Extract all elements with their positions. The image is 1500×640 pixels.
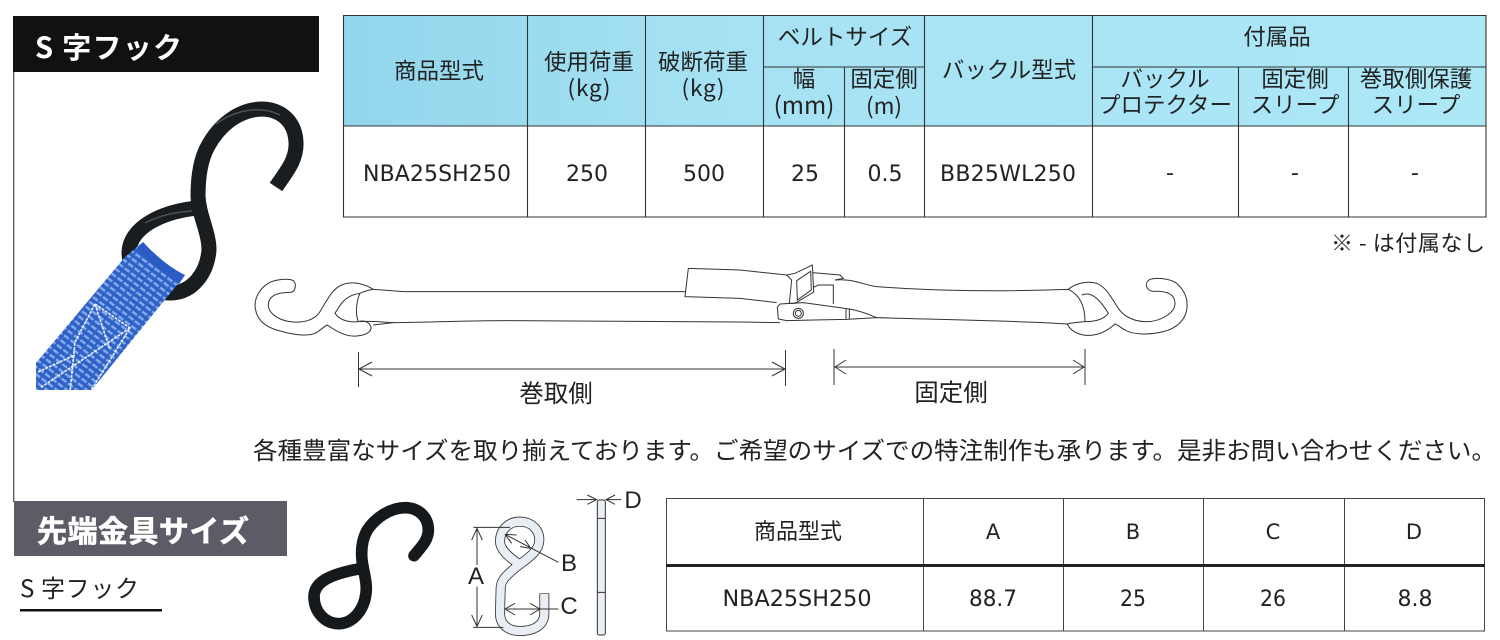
data row: -: [1166, 161, 1174, 186]
left border line: [13, 72, 14, 502]
dimension labels: C: [560, 593, 578, 620]
size data row: NBA25SH250: [722, 587, 872, 612]
header labels: バックル: [1120, 62, 1210, 94]
dimension: fixed side: [834, 349, 1085, 409]
header labels: [394, 20, 1472, 121]
description text: 各種豊富なサイズを取り揃えております。ご希望のサイズでの特注制作も承ります。是非お問い合わせください。: [253, 431, 1496, 466]
dimension labels: D: [624, 487, 642, 514]
dimension: fixed side: 固定側: [914, 374, 988, 409]
header labels: 商品型式: [394, 54, 484, 86]
header labels: 固定側: [850, 62, 918, 94]
spec table: [343, 15, 1486, 217]
size data row: 8.8: [1398, 587, 1432, 612]
data row: 25: [791, 162, 819, 187]
data row: BB25WL250: [940, 162, 1076, 187]
right hook outline: [1067, 278, 1187, 335]
dimension diagram: S hook side view: [577, 495, 621, 635]
left belt and tail: [360, 268, 740, 323]
table header background: [343, 15, 1486, 126]
dimension labels: A: [468, 563, 484, 590]
header labels: 使用荷重: [544, 45, 634, 77]
header labels: バックル型式: [942, 53, 1076, 85]
buckle and right belt: [740, 265, 1085, 324]
dimension: winding side: [358, 350, 786, 410]
header labels: 幅: [793, 62, 815, 94]
size data row: 26: [1260, 587, 1286, 612]
dimension diagram: S hook front view: [472, 522, 558, 631]
dimension labels: [468, 487, 642, 620]
size header labels: A: [986, 520, 1001, 544]
dimension: winding side: 巻取側: [519, 375, 593, 410]
data row: NBA25SH250: [363, 162, 511, 187]
data row: 500: [683, 162, 725, 187]
belt diagram: [255, 265, 1187, 336]
size header labels: C: [1266, 520, 1280, 544]
size data row: 25: [1120, 587, 1146, 612]
heading: 先端金具サイズ: 先端金具サイズ: [37, 507, 249, 551]
data row: [363, 161, 1419, 187]
header labels: (kg): [568, 71, 610, 103]
header labels: 巻取側保護: [1360, 62, 1472, 94]
size header labels: 商品型式: [754, 514, 842, 546]
header labels: 固定側: [1261, 62, 1329, 94]
header labels: スリープ: [1372, 88, 1461, 120]
header labels: (mm): [774, 86, 834, 121]
header labels: (kg): [682, 71, 724, 103]
header labels: プロテクター: [1098, 88, 1232, 120]
size table grid: [666, 498, 1484, 631]
data row: 250: [566, 162, 608, 187]
header labels: 付属品: [1243, 20, 1311, 52]
header separator: [666, 564, 1485, 567]
size header labels: D: [1406, 520, 1422, 544]
data row: -: [1291, 161, 1299, 186]
data row: -: [1411, 161, 1419, 186]
dimension labels: B: [561, 550, 577, 577]
footnote: ※ - は付属なし: [1331, 226, 1485, 258]
heading: S字フック: [13, 16, 319, 72]
size header labels: B: [1126, 520, 1140, 544]
heading: 先端金具サイズ: [14, 501, 287, 556]
size table: [666, 498, 1485, 631]
size header labels: [754, 514, 1422, 546]
heading: S字フック: S 字フック: [35, 25, 182, 67]
left hook outline: [255, 279, 393, 336]
photo: S hook with blue strap: [36, 109, 296, 392]
header labels: 破断荷重: [658, 45, 748, 77]
subheading: S字フック: S 字フック: [20, 569, 139, 604]
header labels: ベルトサイズ: [778, 20, 912, 52]
header labels: スリープ: [1251, 88, 1340, 120]
data row: 0.5: [868, 162, 902, 187]
size data row: 88.7: [969, 587, 1017, 612]
size data row: [722, 587, 1432, 612]
photo: black S hook: [314, 508, 428, 624]
header labels: (m): [866, 89, 902, 121]
table grid: [343, 15, 1486, 217]
